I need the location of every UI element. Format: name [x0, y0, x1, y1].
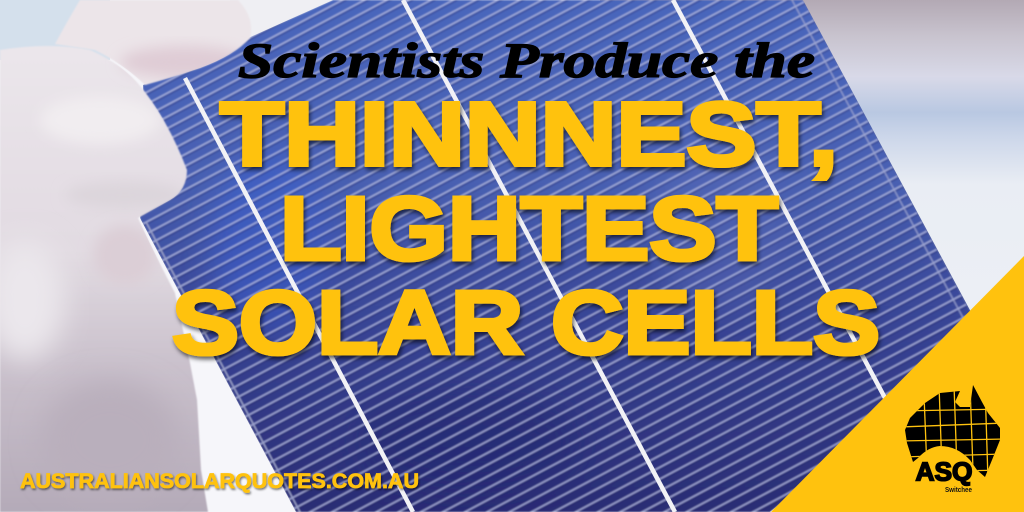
right edge margin line — [791, 0, 964, 318]
busbar 1 — [185, 78, 413, 512]
busbar 3 — [673, 0, 885, 398]
right edge band — [803, 1, 970, 311]
glove: lower hand and thumb — [0, 46, 208, 512]
logo sub-brand: Switchee — [945, 487, 972, 494]
logo wordmark: ASQ — [916, 456, 972, 486]
busbar 2 — [403, 0, 675, 512]
website url: AUSTRALIANSOLARQUOTES.COM.AU — [20, 470, 419, 493]
headline — [172, 85, 880, 374]
headline line 1: THINNNEST, — [220, 85, 838, 185]
glove shading — [0, 43, 239, 433]
ASQ logo — [905, 385, 1000, 492]
icon: Australia map solar grid — [905, 385, 1000, 477]
gloved hand — [0, 0, 251, 512]
headline line 2: LIGHTEST — [280, 180, 778, 280]
yellow corner triangle — [771, 256, 1024, 512]
subtitle: Scientists Produce the — [238, 32, 815, 88]
glove: index fingertip — [55, 0, 251, 85]
left edge band — [140, 218, 268, 458]
headline line 3: SOLAR CELLS — [172, 274, 880, 374]
left edge margin line — [146, 222, 300, 512]
